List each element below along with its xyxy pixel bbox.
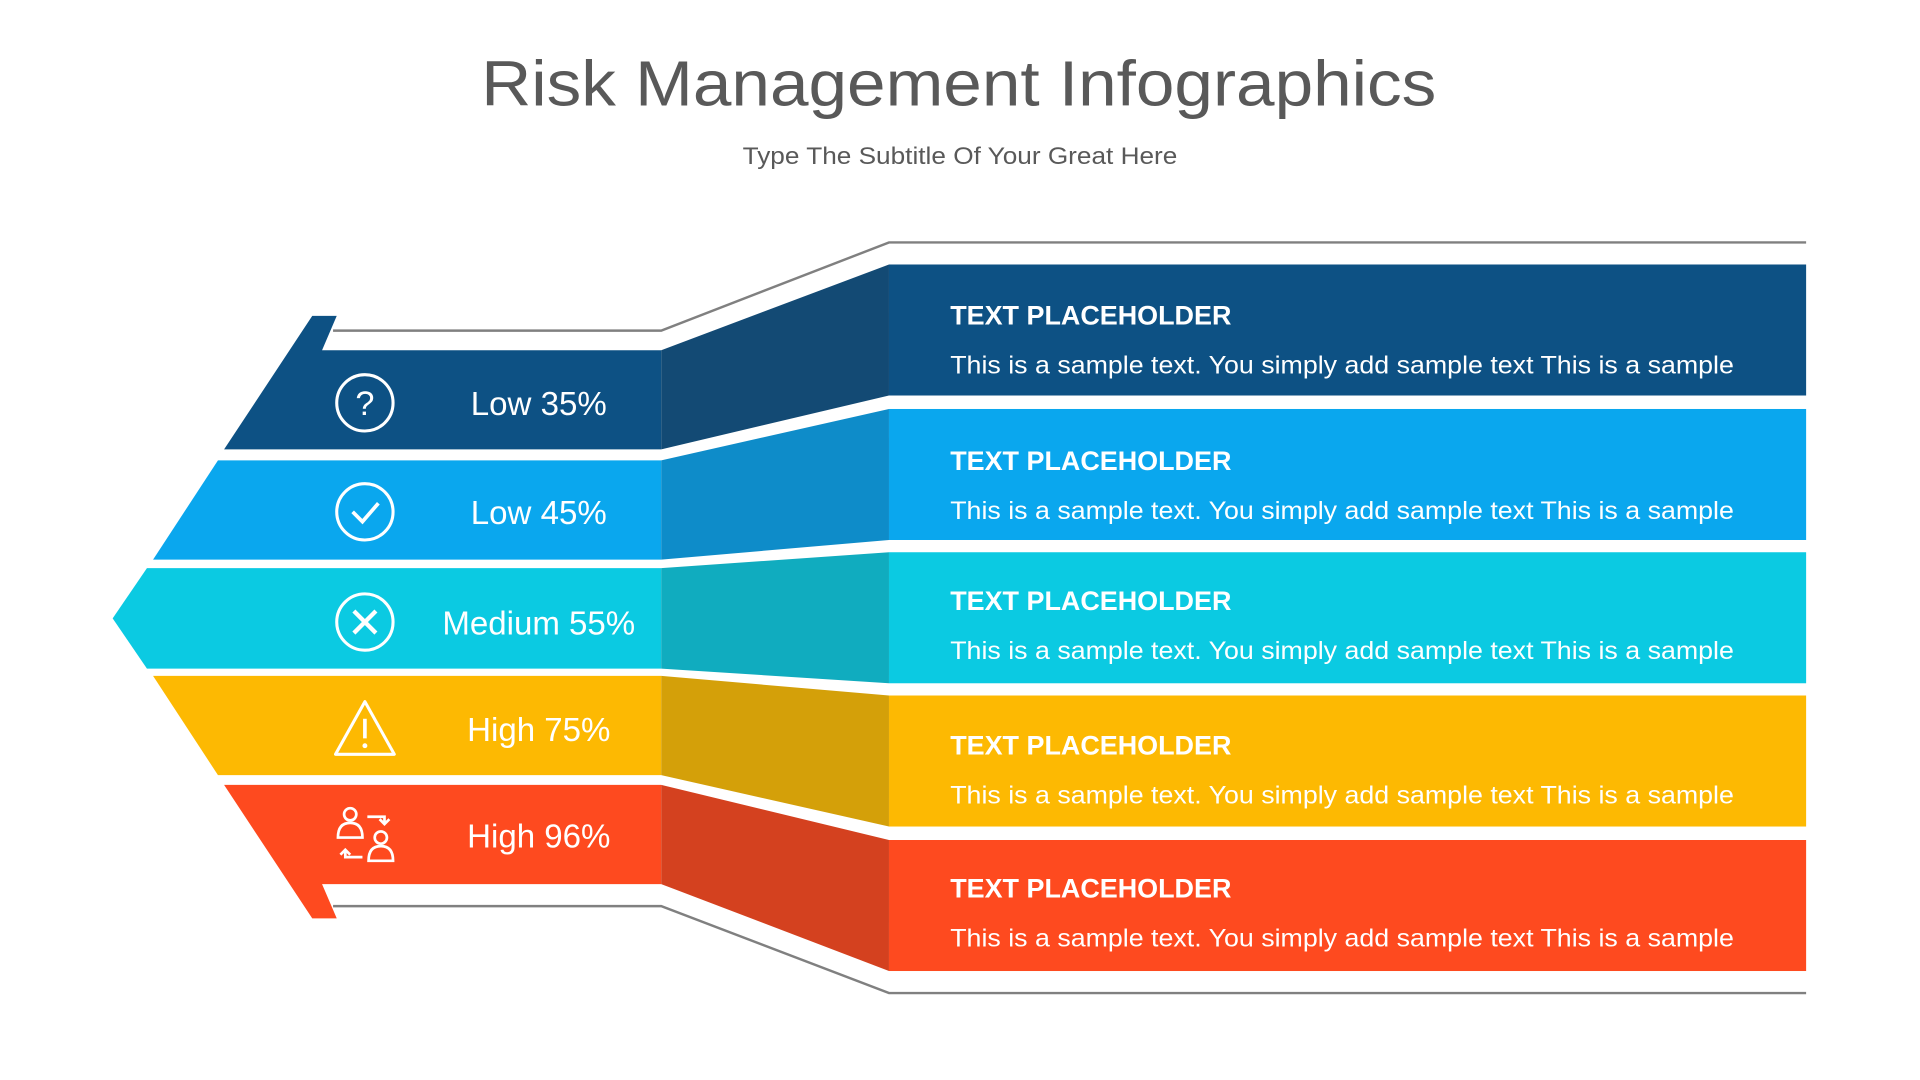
row 2: low 45%: TEXT PLACEHOLDER: [950, 446, 1231, 476]
title: Risk Management Infographics: [481, 48, 1436, 119]
row 4: high 75%: High 75%: [467, 712, 610, 749]
row 5: high 96%: TEXT PLACEHOLDER: [950, 874, 1231, 904]
outline lines: [333, 242, 1806, 993]
row 5: high 96%: [224, 785, 1806, 971]
row 4: high 75%: This is a sample text. You simply add sample text This is a sample: [950, 781, 1734, 809]
row 3: medium 55%: TEXT PLACEHOLDER: [950, 586, 1231, 616]
row 1: low 35%: [224, 264, 1806, 449]
row 4: high 75%: [153, 676, 1806, 827]
row 2: low 45%: Low 45%: [471, 495, 607, 532]
row 2: low 45%: This is a sample text. You simply add sample text This is a sample: [950, 497, 1734, 525]
row 2: low 45%: [153, 409, 1806, 560]
row 5: high 96%: High 96%: [467, 818, 610, 855]
row 1: low 35%: This is a sample text. You simply add sample text This is a sample: [950, 351, 1734, 379]
subtitle: Type The Subtitle Of Your Great Here: [743, 143, 1177, 170]
row 3: medium 55%: This is a sample text. You simply add sample text This is a sample: [950, 637, 1734, 665]
row 3: medium 55%: [113, 552, 1806, 683]
row 4: high 75%: TEXT PLACEHOLDER: [950, 730, 1231, 760]
row 3: medium 55%: Medium 55%: [442, 605, 635, 642]
row 5: high 96%: This is a sample text. You simply add sample text This is a sample: [950, 925, 1734, 953]
row 1: low 35%: TEXT PLACEHOLDER: [950, 300, 1231, 330]
row 1: low 35%: Low 35%: [471, 386, 607, 423]
row 1: low 35%: ?: [355, 385, 374, 423]
